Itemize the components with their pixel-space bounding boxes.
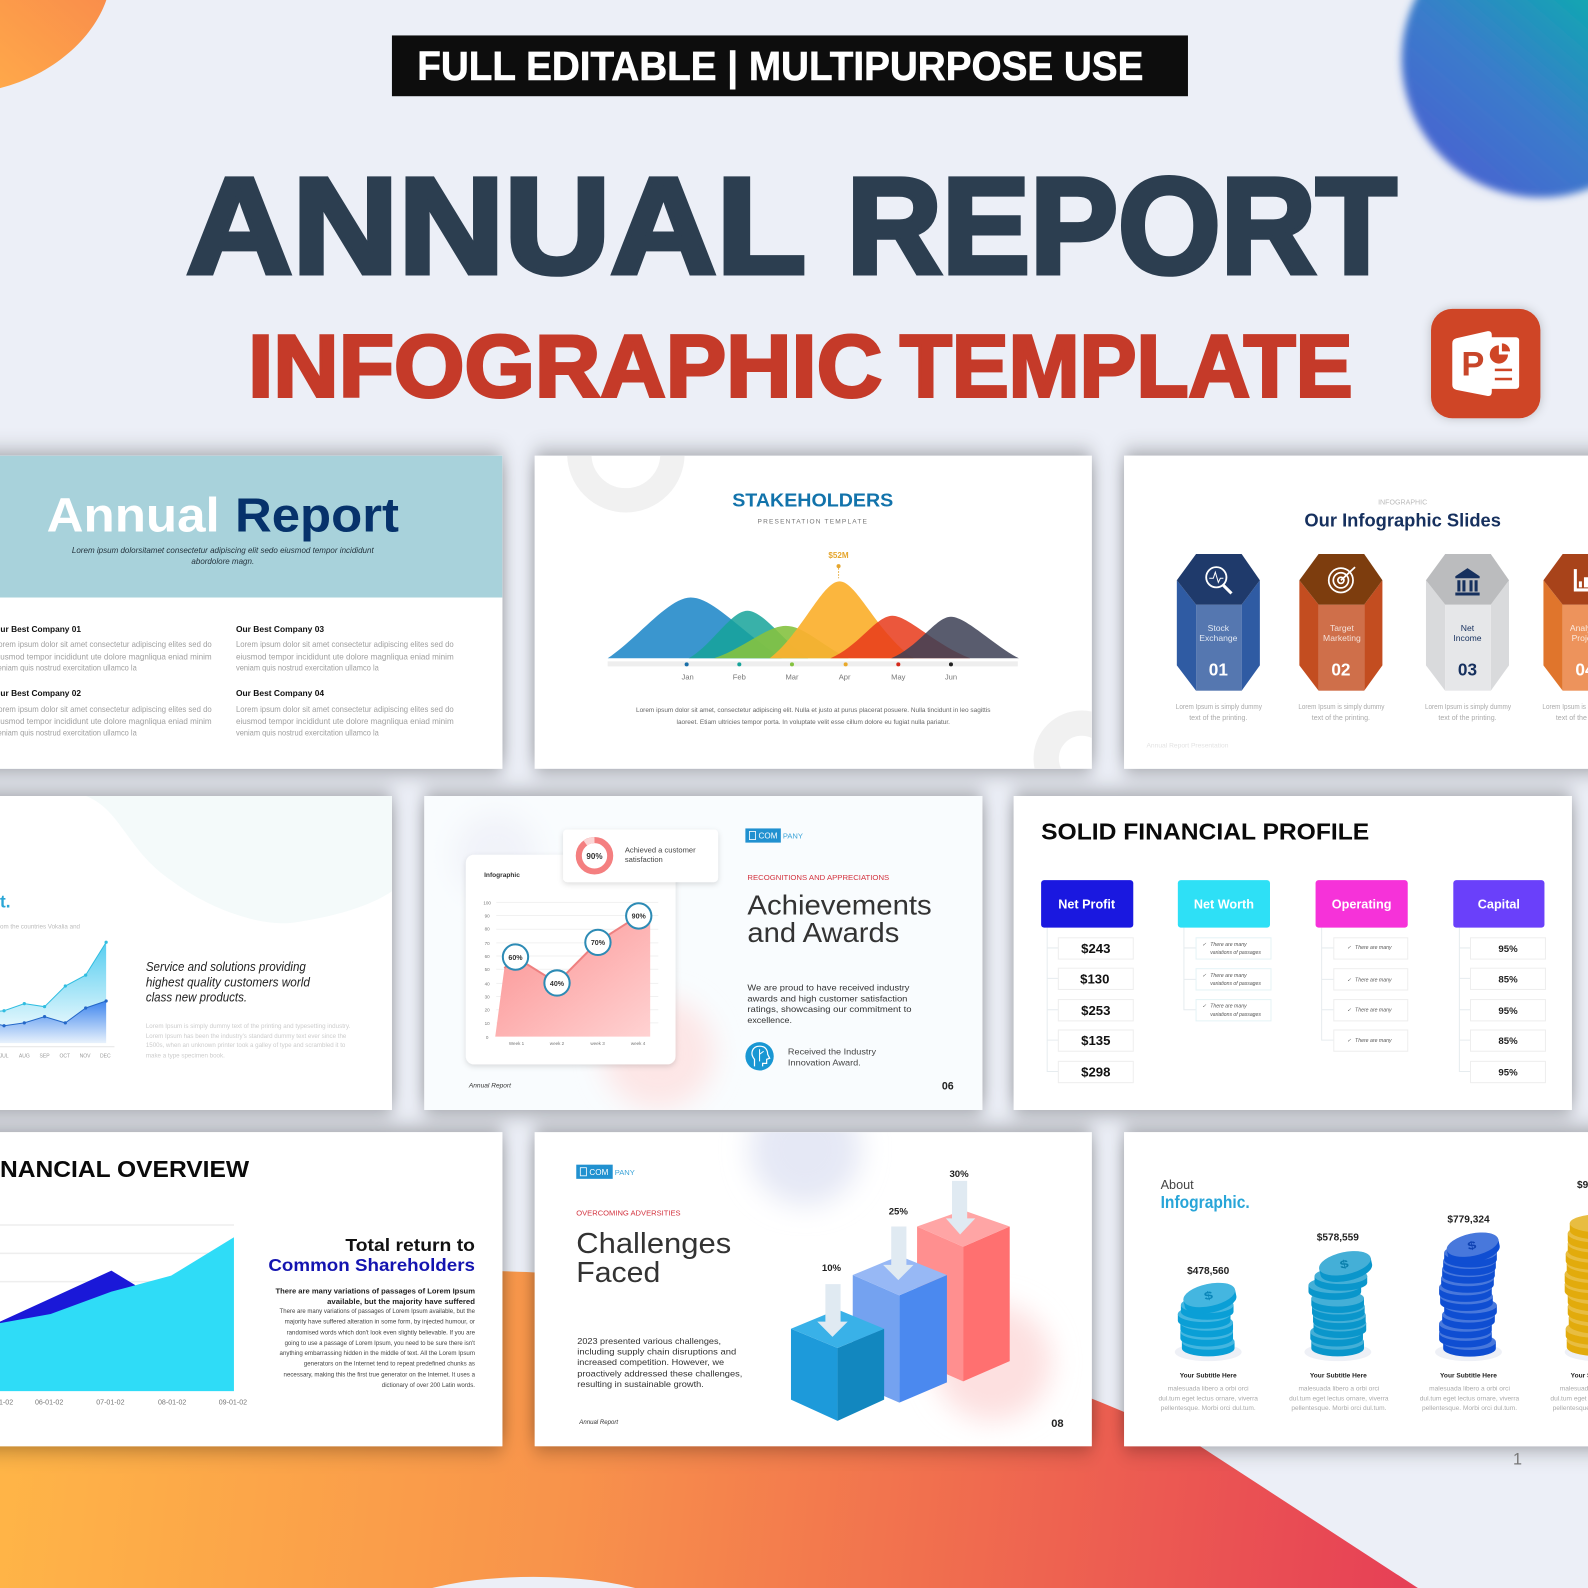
slide subheading	[72, 546, 374, 566]
isometric bar: 10%: 10%	[822, 1263, 842, 1274]
slide heading: About	[1161, 1178, 1194, 1192]
slide shadows	[0, 456, 1588, 1446]
area chart: SEP	[40, 1053, 50, 1059]
slide heading: Achievements	[747, 890, 932, 921]
chart card	[466, 855, 676, 1064]
column: net worth: ✓	[1202, 973, 1207, 979]
mountain chart: Feb	[733, 673, 746, 682]
slide statement: highest quality customers world	[146, 975, 311, 989]
slide heading	[748, 894, 931, 942]
slide subheading: Lorem ipsum dolorsitamet consectetur adipiscing elit sedo eiusmod tempor incididunt	[72, 546, 374, 555]
hexagon 02 target marketing: Lorem Ipsum is simply dummy	[1298, 703, 1385, 711]
coin captions: Your Subtitle Here	[1440, 1372, 1497, 1379]
chart card: 30	[485, 995, 490, 1000]
slide heading: Infographic.	[1161, 1192, 1250, 1212]
company text blocks: veniam quis nostrud exercitation ullamco la	[236, 663, 379, 672]
company logo	[745, 828, 803, 843]
satisfaction callout	[563, 829, 718, 882]
column: net worth: ✓	[1202, 942, 1207, 948]
company logo: PANY	[783, 832, 803, 841]
mountain chart: Mar	[785, 673, 799, 682]
slide paragraph: necessary, making this the first true generator on the Internet. It uses a	[284, 1372, 476, 1378]
hexagon 03 net income: Income	[1453, 633, 1482, 643]
column: capital: 85%	[1498, 1036, 1518, 1047]
bold intro	[275, 1286, 475, 1306]
hexagon 02 target marketing: Marketing	[1323, 633, 1361, 643]
coin stack 1	[1175, 1266, 1242, 1361]
company text blocks: Lorem ipsum dolor sit amet consectetur adipiscing elites sed do	[0, 640, 212, 649]
slide paragraph: awards and high customer satisfaction	[747, 995, 907, 1004]
slide heading	[578, 1232, 730, 1282]
column: net profit: $135	[1081, 1033, 1110, 1048]
column: operating: There are many	[1355, 1008, 1392, 1014]
column: net worth: variations of passages	[1210, 1012, 1261, 1018]
hexagon 04 analytic project	[1542, 554, 1588, 722]
company text blocks: Our Best Company 03	[236, 624, 324, 634]
slide subheading: abordolore magn.	[191, 557, 254, 566]
mountain chart: $52M	[828, 551, 849, 560]
coin stack 4	[1565, 1180, 1588, 1361]
decorative orange blob top left	[0, 0, 106, 88]
chart card: 10	[485, 1021, 490, 1026]
page number: 1	[1513, 1450, 1522, 1468]
slide paragraph	[280, 1309, 476, 1389]
slide paragraph: majority have suffered alteration in some form, by injected humour, or	[285, 1320, 475, 1326]
main title	[186, 149, 1397, 302]
chart card: 60%	[508, 954, 523, 962]
coin stack 3: $779,324	[1447, 1214, 1490, 1225]
slide paragraph: 2023 presented various challenges,	[577, 1337, 721, 1346]
slide footer: Annual Report Presentation	[1146, 742, 1229, 749]
panel: about infographic coin slide	[1124, 1132, 1588, 1446]
slide paragraph: proactively addressed these challenges,	[577, 1369, 742, 1378]
coin stack 1: $	[1203, 1289, 1214, 1303]
hexagon 01 stock exchange: text of the printing.	[1189, 714, 1247, 722]
slide statement: Service and solutions providing	[146, 960, 306, 974]
award caption: Innovation Award.	[788, 1058, 861, 1067]
slide heading right	[268, 1235, 475, 1275]
chart card: 90%	[632, 913, 647, 921]
hexagon 02 target marketing: Target	[1330, 623, 1354, 633]
slide paragraph	[747, 983, 912, 1025]
column: capital: 95%	[1498, 1006, 1518, 1017]
area chart: 09-01-02	[219, 1399, 247, 1407]
column: operating: Operating	[1332, 897, 1392, 911]
hexagon 01 stock exchange: 01	[1209, 660, 1228, 680]
slide heading fragment: t.	[0, 891, 11, 911]
isometric bar: 25%	[853, 1206, 947, 1403]
slide paragraph: going to use a passage of Lorem Ipsum, you need to be sure there isn't	[285, 1341, 475, 1347]
hexagon 02 target marketing: text of the printing.	[1312, 714, 1370, 722]
slide eyebrow: RECOGNITIONS AND APPRECIATIONS	[747, 874, 890, 882]
isometric bar: 25%: 25%	[889, 1206, 908, 1217]
column: net profit: Net Profit	[1058, 897, 1116, 911]
slide heading: SOLID FINANCIAL PROFILE	[1041, 819, 1369, 845]
bold intro: There are many variations of passages of Lorem Ipsum	[275, 1286, 475, 1295]
column: net worth: ✓	[1202, 1004, 1207, 1010]
column: net worth: variations of passages	[1210, 981, 1261, 987]
chart card: 0	[486, 1035, 489, 1040]
panel: annual report cover slide	[0, 456, 502, 769]
slide heading: Faced	[576, 1257, 660, 1289]
mountain chart: May	[891, 673, 906, 682]
coin stack 2	[1304, 1233, 1374, 1361]
isometric bar: 30%	[917, 1169, 1010, 1381]
slide eyebrow: OVERCOMING ADVERSITIES	[576, 1209, 681, 1217]
slide footer: Annual Report	[578, 1420, 618, 1426]
coin captions: pellentesque. Morbi orci dul.tum.	[1291, 1405, 1387, 1412]
top banner: FULL EDITABLE | MULTIPURPOSE USE	[417, 43, 1143, 89]
area chart	[0, 941, 114, 1059]
company logo: COM	[589, 1168, 609, 1177]
slide paragraph: 1500s, when an unknown printer took a galley of type and scrambled it to	[146, 1042, 346, 1049]
chart card: 100	[483, 900, 491, 905]
slide heading: Our Infographic Slides	[1304, 511, 1501, 531]
chart card: 80	[485, 927, 490, 932]
hexagon 01 stock exchange: Exchange	[1199, 633, 1238, 643]
slide heading: Report	[235, 489, 399, 543]
column: operating	[1316, 880, 1408, 1051]
coin stack 2: $	[1339, 1257, 1350, 1271]
slide heading	[1161, 1178, 1250, 1212]
hexagon 01 stock exchange: Lorem Ipsum is simply dummy	[1176, 703, 1262, 711]
chart card: Week 1	[509, 1041, 525, 1046]
award caption: Received the Industry	[788, 1047, 877, 1056]
column: capital: 95%	[1498, 944, 1518, 955]
chart card: 70	[485, 941, 490, 946]
area chart: AUG	[19, 1053, 30, 1059]
chart card: Infographic	[484, 872, 520, 879]
column: operating: ✓	[1347, 1008, 1352, 1014]
column: capital	[1453, 880, 1545, 1083]
area chart: 06-01-02	[35, 1399, 63, 1407]
slide paragraph: We are proud to have received industry	[747, 983, 911, 992]
column: operating: ✓	[1347, 945, 1352, 951]
column: net worth: There are many	[1210, 973, 1247, 979]
slide paragraph: ratings, showcasing our commitment to	[747, 1005, 912, 1014]
column: net profit: $130	[1080, 971, 1109, 986]
icon: PowerPoint	[1431, 309, 1540, 418]
column: capital: 95%	[1498, 1068, 1518, 1079]
slide paragraph: make a type specimen book.	[146, 1052, 225, 1059]
company logo	[576, 1165, 635, 1179]
decorative gradient wave at bottom	[0, 1270, 1418, 1588]
slide paragraph: laoreet. Etiam ultricies tempor porta. In voluptate velit esse cillum dolore eu fugiat nulla pariatur.	[677, 719, 950, 726]
chart card: 60	[485, 954, 490, 959]
panel: stakeholders slide	[568, 456, 1092, 768]
column: net profit: $298	[1081, 1065, 1110, 1080]
slide caption fragment: om the countries Vokalia and	[0, 924, 80, 931]
company text blocks: Lorem ipsum dolor sit amet consectetur adipiscing elites sed do	[0, 705, 212, 714]
hexagon 01 stock exchange: Stock	[1208, 623, 1230, 633]
company logo: COM	[759, 832, 778, 841]
satisfaction callout: 90%	[586, 852, 603, 861]
slide heading: STAKEHOLDERS	[732, 489, 893, 510]
chart card: 50	[485, 967, 490, 972]
slide heading right: Common Shareholders	[268, 1255, 475, 1275]
slide paragraph	[636, 707, 991, 726]
slide paragraph	[577, 1337, 742, 1389]
column: net worth: Net Worth	[1194, 897, 1254, 911]
slide heading: Annual	[47, 489, 220, 543]
slide paragraph: including supply chain disruptions and	[577, 1348, 736, 1357]
slide statement: class new products.	[146, 991, 247, 1005]
column: operating: ✓	[1347, 977, 1352, 983]
decorative pale arc at bottom	[382, 1577, 686, 1588]
chart card: week 4	[631, 1041, 646, 1046]
slide paragraph: increased competition. However, we	[577, 1358, 725, 1367]
chart card: 90	[485, 914, 490, 919]
coin captions: dul.tum eget lectus ornare, viverra	[1158, 1396, 1258, 1403]
chart card: 40%	[550, 980, 565, 988]
coin captions: pellentesque. Morbi orci dul.tum.	[1161, 1405, 1256, 1412]
column: net worth: There are many	[1210, 942, 1247, 948]
main title: REPORT	[847, 149, 1397, 302]
panel: challenges faced slide	[534, 1132, 1092, 1446]
icon: PowerPoint: P	[1461, 346, 1484, 384]
slide paragraph: Lorem ipsum dolor sit amet, consectetur adipiscing elit. Nulla et justo at purus placerat posuere. Nulla tincidunt in leo sagittis	[636, 707, 991, 714]
company text blocks: Lorem ipsum dolor sit amet consectetur adipiscing elites sed do	[236, 640, 454, 649]
column: capital: 85%	[1498, 974, 1518, 985]
company text blocks: eiusmod tempor incididunt ute dolore magnliqua eniad minim	[236, 652, 454, 661]
slide paragraph: There are many variations of passages of Lorem Ipsum available, but the	[280, 1309, 476, 1315]
chart card: 40	[485, 981, 490, 986]
hexagon 02 target marketing	[1298, 554, 1385, 722]
company text blocks: veniam quis nostrud exercitation ullamco la	[236, 728, 379, 737]
area chart	[0, 1225, 247, 1407]
satisfaction callout: satisfaction	[625, 855, 663, 864]
company text blocks: eiusmod tempor incididunt ute dolore magnliqua eniad minim	[0, 717, 212, 726]
column: net profit: $253	[1081, 1003, 1110, 1018]
slide subheading: PRESENTATION TEMPLATE	[758, 519, 868, 526]
coin captions	[1158, 1372, 1588, 1412]
chart card: 70%	[591, 939, 606, 947]
company text blocks: eiusmod tempor incididunt ute dolore magnliqua eniad minim	[236, 717, 454, 726]
area chart: DEC	[100, 1053, 111, 1059]
column: capital: Capital	[1478, 897, 1520, 911]
column: operating: ✓	[1347, 1038, 1352, 1044]
coin stack 3	[1435, 1214, 1502, 1361]
area chart: OCT	[59, 1053, 70, 1059]
coin stack 3: $	[1466, 1238, 1478, 1253]
mountain chart: Jun	[945, 673, 957, 682]
bold intro: available, but the majority have suffered	[327, 1297, 475, 1306]
hexagon 03 net income: Net	[1461, 623, 1475, 633]
chart card: week 3	[590, 1041, 605, 1046]
subtitle: TEMPLATE	[900, 316, 1353, 415]
award caption	[788, 1048, 876, 1066]
slide eyebrow: INFOGRAPHIC	[1378, 498, 1427, 506]
subtitle: INFOGRAPHIC	[248, 316, 882, 415]
column: operating: There are many	[1355, 977, 1392, 983]
tree connector lines	[1047, 928, 1471, 1071]
column: net worth: There are many	[1210, 1004, 1247, 1010]
mountain chart: Apr	[839, 673, 851, 682]
slide paragraph: generators on the Internet tend to repeat predefined chunks as	[304, 1362, 475, 1368]
mountain chart: Jan	[682, 673, 694, 682]
company text blocks: Our Best Company 04	[236, 688, 324, 698]
chart card: 20	[485, 1008, 490, 1013]
hexagon 02 target marketing: 02	[1331, 660, 1350, 680]
slide heading right: Total return to	[345, 1235, 475, 1255]
page number: 06	[942, 1081, 954, 1093]
chart card: week 2	[550, 1041, 565, 1046]
main title: ANNUAL	[186, 149, 806, 302]
hexagon 03 net income: 03	[1458, 660, 1477, 680]
coin captions: Your Subtitle Here	[1310, 1372, 1367, 1379]
column: net worth	[1178, 880, 1271, 1021]
slide paragraph: Lorem Ipsum has been the industry's standard dummy text ever since the	[146, 1033, 347, 1040]
slide heading	[47, 489, 399, 543]
coin captions: malesuada libero a orbi orci	[1429, 1386, 1510, 1393]
company text blocks	[0, 624, 454, 737]
coin captions: dul.tum eget lectus ornare, viverra	[1420, 1396, 1520, 1403]
slide paragraph: randomised words which don't look even slightly believable. If you are	[287, 1330, 476, 1336]
hexagon 01 stock exchange	[1176, 554, 1262, 722]
hexagon 03 net income	[1425, 554, 1511, 722]
slide footer: Annual Report	[468, 1083, 512, 1090]
coin captions: pellentesque. Morbi orci dul.tum.	[1422, 1405, 1517, 1412]
isometric bar: 30%: 30%	[949, 1169, 969, 1180]
company logo: PANY	[615, 1168, 635, 1177]
page number: 08	[1051, 1418, 1064, 1430]
hexagon 03 net income: text of the printing.	[1438, 714, 1497, 722]
isometric bar: 10%	[791, 1263, 884, 1421]
subtitle	[248, 316, 1353, 415]
coin stack 1: $478,560	[1187, 1266, 1230, 1277]
column: operating: There are many	[1355, 945, 1392, 951]
coin stack 2: $578,559	[1317, 1233, 1359, 1244]
coin captions: malesuada libero a orbi orci	[1298, 1386, 1380, 1393]
slide paragraph: anything embarrassing hidden in the middle of text. All the Lorem Ipsum	[280, 1351, 475, 1357]
slide paragraph: Lorem Ipsum is simply dummy text of the printing and typesetting industry.	[146, 1023, 351, 1030]
column: operating: There are many	[1355, 1038, 1392, 1044]
panel: our infographic slides	[1124, 456, 1588, 769]
area chart: NOV	[80, 1053, 91, 1059]
company text blocks: Lorem ipsum dolor sit amet consectetur adipiscing elites sed do	[236, 705, 454, 714]
panel: solid financial profile slide	[1014, 796, 1572, 1110]
slide statement	[146, 960, 311, 1005]
panel: achievements and awards slide	[447, 807, 954, 1110]
panel: service and solutions slide	[0, 796, 392, 1059]
slide heading: Challenges	[576, 1228, 731, 1260]
mountain chart	[608, 551, 1019, 682]
company text blocks: eiusmod tempor incididunt ute dolore magnliqua eniad minim	[0, 652, 212, 661]
icon: award head	[745, 1042, 774, 1070]
slide paragraph: excellence.	[747, 1016, 792, 1025]
decorative blue circle top right	[1402, 0, 1588, 197]
satisfaction callout: Achieved a customer	[625, 846, 696, 855]
hexagon 03 net income: Lorem Ipsum is simply dummy	[1425, 703, 1511, 711]
column: net profit	[1041, 880, 1133, 1083]
slide paragraph: dictionary of over 200 Latin words.	[382, 1383, 475, 1389]
coin captions: malesuada libero a orbi orci	[1168, 1386, 1249, 1393]
coin captions: Your Subtitle Here	[1180, 1372, 1237, 1379]
slide paragraph: resulting in sustainable growth.	[577, 1380, 704, 1389]
area chart: 08-01-02	[158, 1399, 186, 1407]
coin captions: dul.tum eget lectus ornare, viverra	[1289, 1396, 1389, 1403]
area chart: 07-01-02	[96, 1399, 125, 1407]
column: net profit: $243	[1081, 941, 1110, 956]
panel: financial overview slide	[0, 1132, 502, 1446]
column: net worth: variations of passages	[1210, 950, 1261, 956]
slide heading: and Awards	[747, 917, 899, 948]
slide paragraph	[146, 1023, 351, 1059]
